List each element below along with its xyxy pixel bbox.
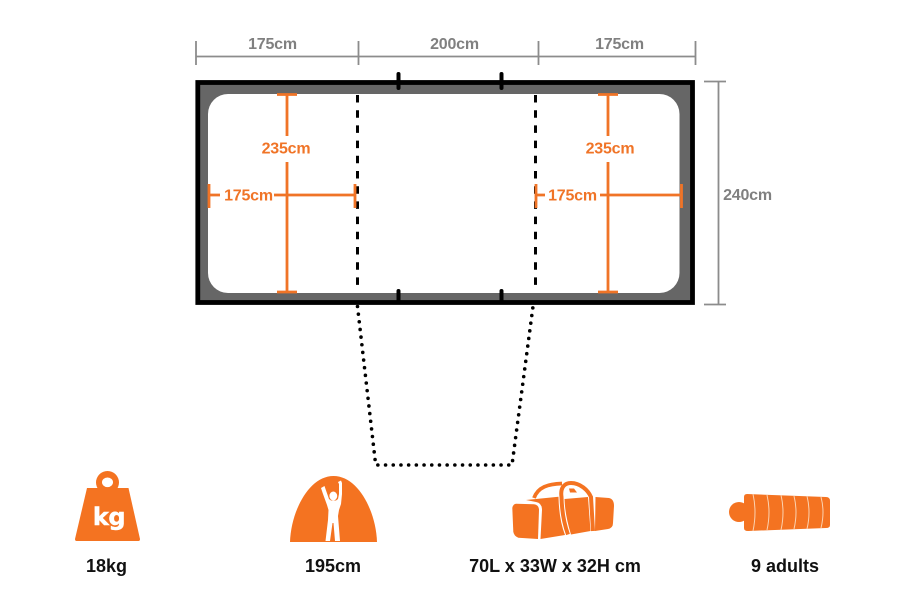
side height dimension: 240cm: 240cm (723, 187, 772, 204)
icon: weight (75, 471, 140, 541)
top width dimension: left 175cm (196, 36, 358, 65)
top width dimension: right 175cm (538, 36, 696, 65)
label: bag dimensions: 70L x 33W x 32H cm (469, 556, 641, 576)
icon: weight: kg (93, 503, 125, 531)
top width dimension: right 175cm: 175cm (595, 36, 644, 53)
label: peak height: 195cm (305, 556, 361, 576)
icon: sleeping bag (729, 494, 830, 531)
dotted awning outline (358, 306, 533, 465)
right dashed room divider (534, 95, 537, 286)
icon: tent height with person (290, 476, 377, 542)
right bedroom dimensions: 175cm (548, 188, 597, 204)
right bedroom dimensions (536, 94, 682, 292)
top width dimension: centre 200cm (358, 36, 538, 65)
right bedroom dimensions: 235cm (586, 140, 634, 158)
label: sleeping capacity: 9 adults (751, 556, 819, 576)
tent floor plan outline (198, 74, 693, 302)
label: weight: 18kg (86, 556, 127, 576)
icon: carry bag (512, 483, 614, 539)
top width dimension: centre 200cm: 200cm (430, 36, 479, 53)
left bedroom dimensions (209, 94, 355, 292)
side height dimension: 240cm (704, 82, 772, 304)
top width dimension: left 175cm: 175cm (248, 36, 297, 53)
left bedroom dimensions: 175cm (224, 188, 273, 204)
left dashed room divider (356, 95, 359, 286)
left bedroom dimensions: 235cm (262, 140, 310, 158)
